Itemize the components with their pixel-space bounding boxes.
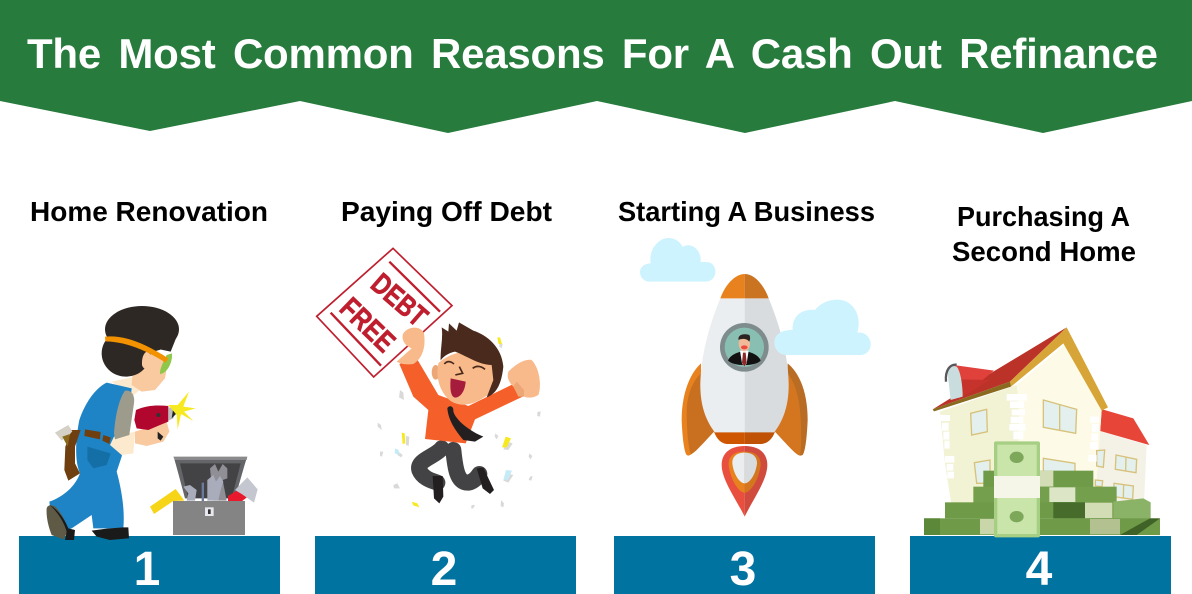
title banner: [0, 0, 1192, 133]
number bar 3: [614, 536, 875, 594]
illustration: debt free man: [317, 248, 541, 508]
flame: [722, 446, 745, 517]
illustration: worker with drill and toolbox: [47, 306, 258, 540]
cloud: right: [774, 300, 871, 355]
porthole with businessman: [720, 323, 769, 372]
heading: starting a business: Starting A Business: [618, 196, 875, 227]
cloud: left: [640, 238, 715, 282]
stamp: debt free sign: DEBT: [364, 267, 434, 334]
number bar 2: [315, 536, 576, 594]
money pile: [924, 441, 1160, 537]
title: The Most Common Reasons For A Cash Out Refinance: [27, 30, 1158, 77]
number bar 4: [910, 536, 1171, 594]
stamp: debt free sign: FREE: [333, 291, 402, 359]
heading: home renovation: Home Renovation: [30, 196, 268, 227]
heading: purchasing a second home: [952, 201, 1136, 267]
heading: purchasing a second home: Purchasing A: [957, 201, 1130, 232]
illustration: house and money: [924, 327, 1160, 537]
stamp: debt free sign: [317, 248, 452, 377]
fins: [682, 363, 714, 456]
number bar 1: [19, 536, 280, 594]
heading: purchasing a second home: Second Home: [952, 236, 1136, 267]
illustration: rocket and clouds: [640, 238, 871, 517]
body: [714, 432, 745, 444]
heading: paying off debt: Paying Off Debt: [341, 196, 552, 227]
